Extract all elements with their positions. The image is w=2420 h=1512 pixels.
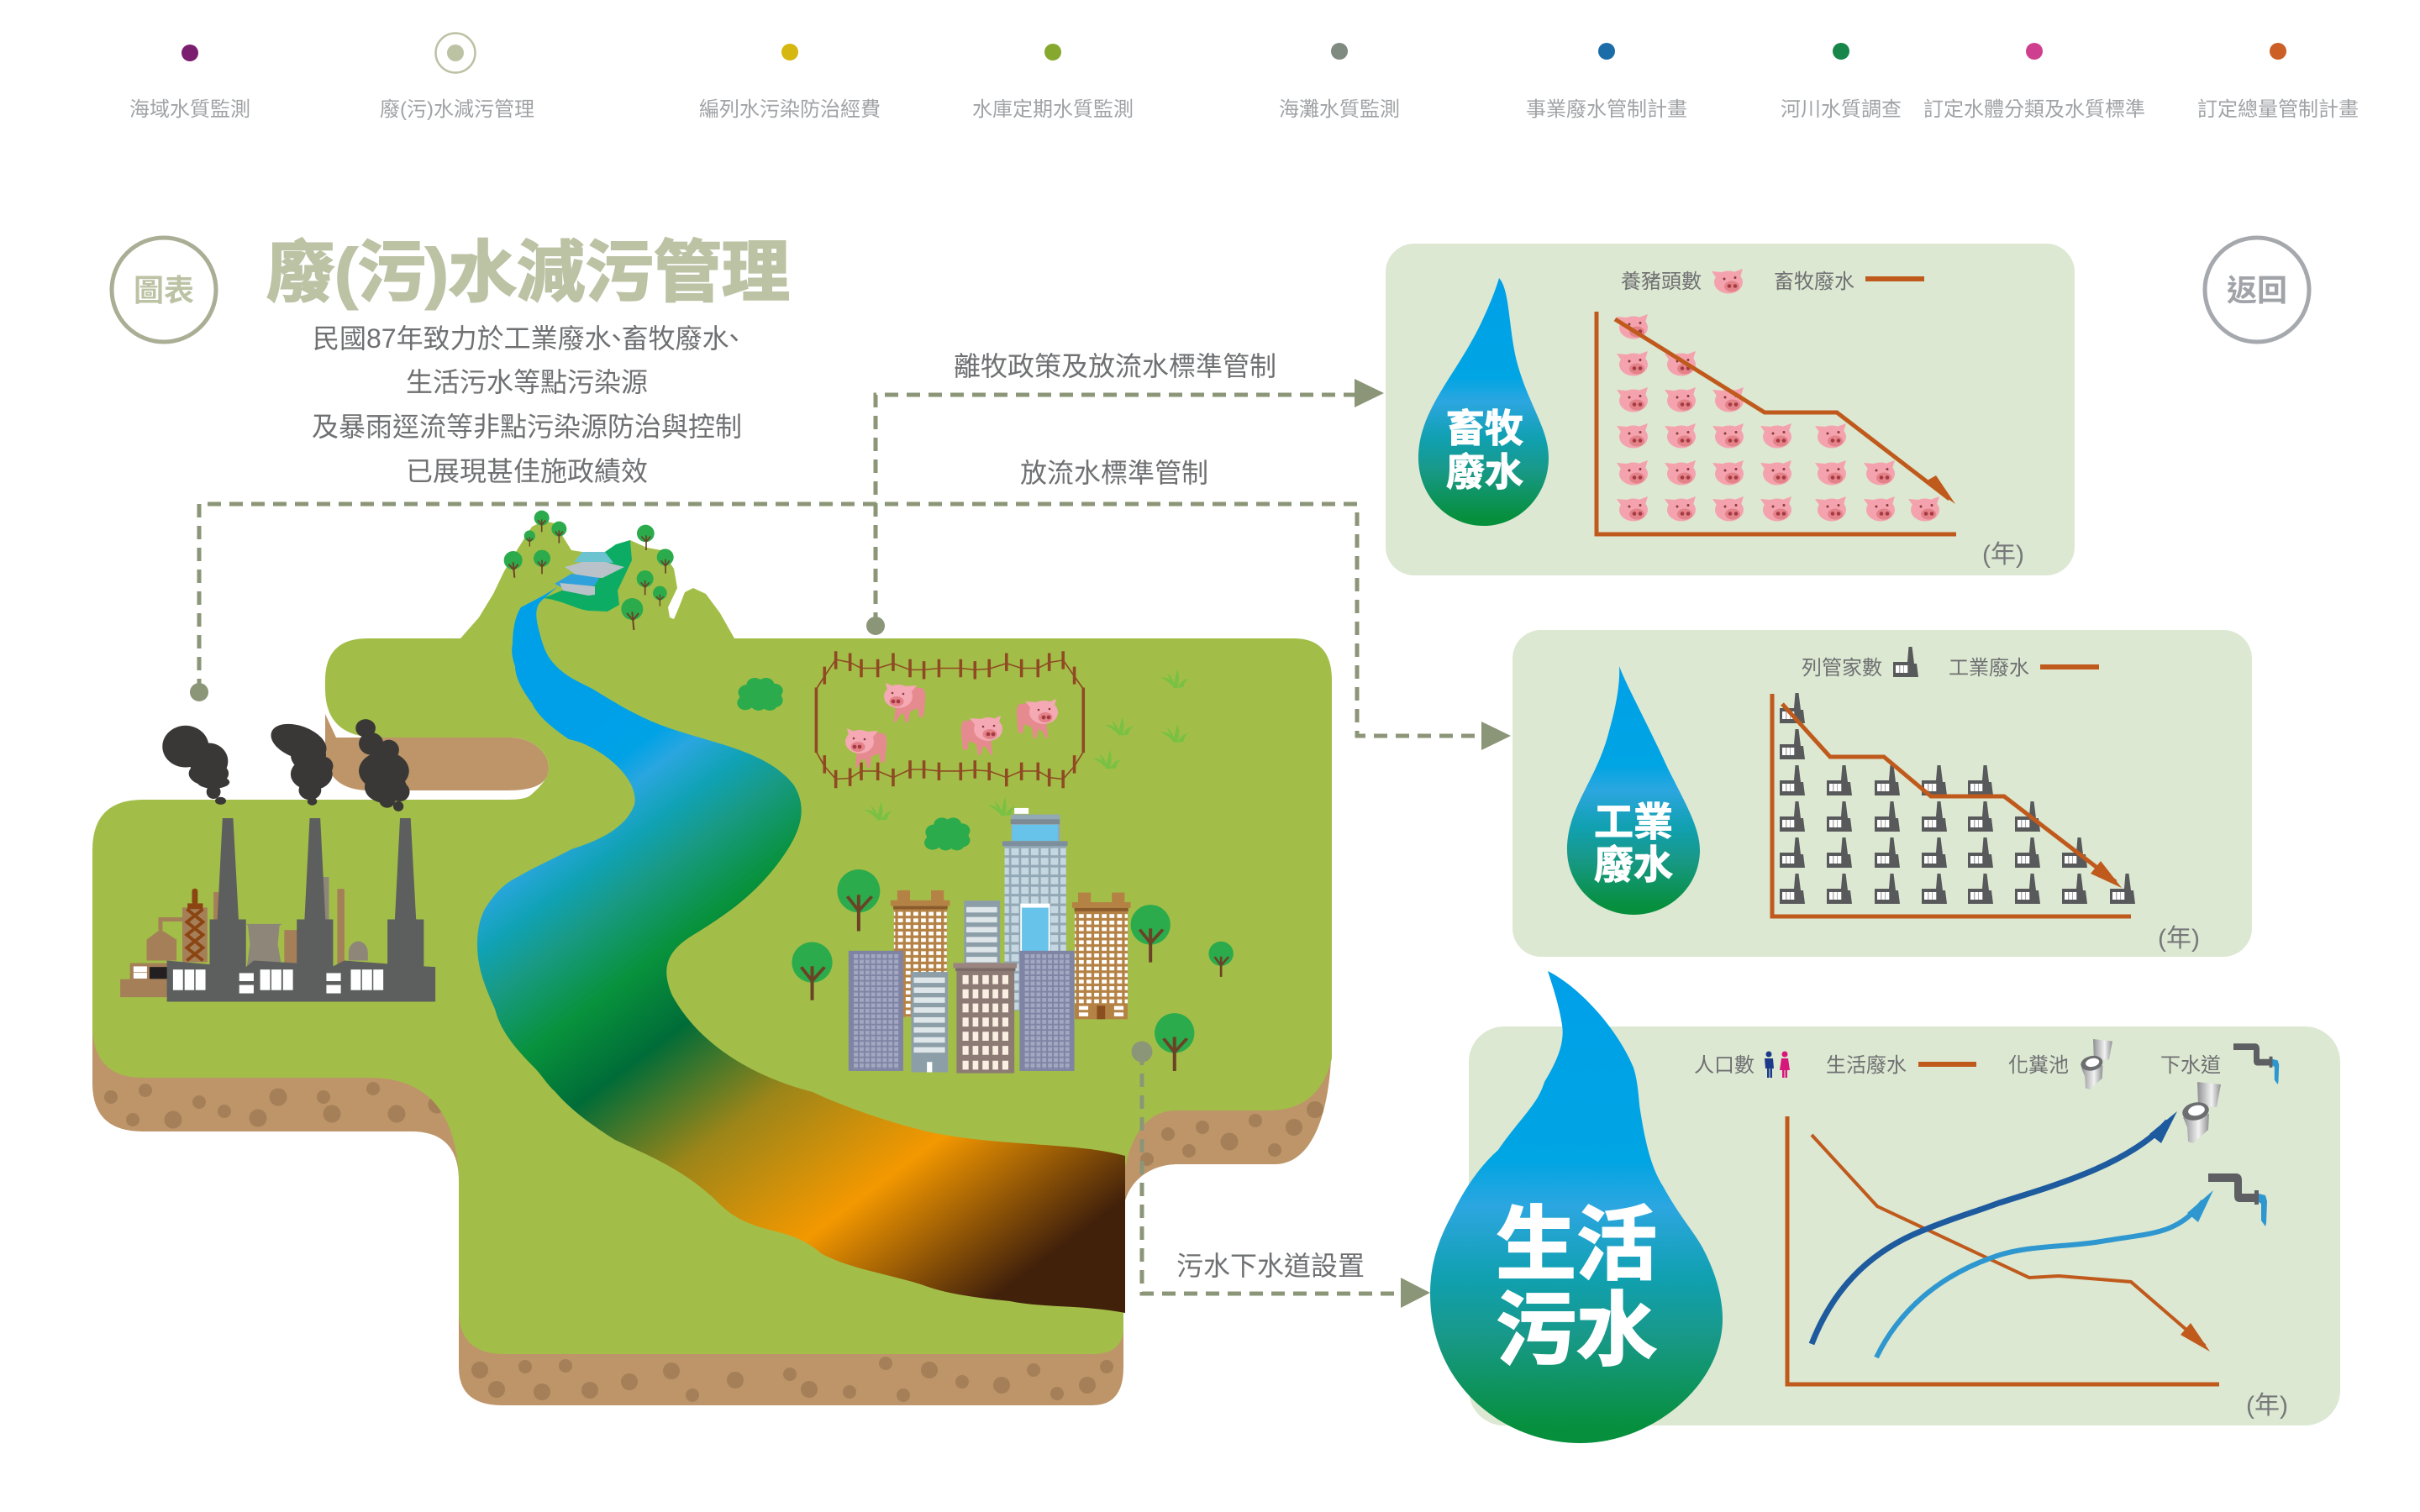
- drop: industrial: 工業: [1594, 800, 1673, 844]
- connector: sewer installation: [1131, 1042, 1430, 1308]
- drop: industrial: [1567, 666, 1700, 915]
- button: chart: [112, 238, 216, 342]
- drop: livestock: 畜牧: [1446, 407, 1523, 450]
- button: back: 返回: [2227, 273, 2287, 307]
- connector: livestock policy: [866, 379, 1384, 635]
- pig pictogram chart: [1597, 312, 1956, 534]
- pig pen, shrubs, grass and city: [737, 651, 1234, 1074]
- legend: 列管家數: [1802, 657, 1882, 680]
- top navigation timeline: 編列水污染防治經費: [699, 98, 881, 121]
- legend: 下水道: [2160, 1054, 2221, 1077]
- grass tufts: [864, 669, 1189, 820]
- grey slat buildings: [911, 900, 1000, 1072]
- landscape: [92, 511, 1332, 1405]
- top navigation timeline: 水庫定期水質監測: [972, 98, 1134, 121]
- title: 廢(污)水減污管理: [266, 235, 790, 310]
- hill trees: [504, 511, 674, 630]
- brown buildings: [891, 890, 1131, 1019]
- taupe building: [953, 963, 1017, 1074]
- icon: septic tank: [2181, 1082, 2221, 1143]
- soil layers: [92, 714, 1332, 1405]
- drop: domestic: 污水: [1496, 1286, 1657, 1376]
- year axis label: (年): [1982, 541, 2024, 569]
- drop: domestic: 生活: [1496, 1200, 1657, 1290]
- legend: [1802, 647, 2099, 680]
- river: [477, 586, 1125, 1313]
- grass ground: [92, 638, 1332, 1354]
- curve: sewer: [1876, 1190, 2213, 1357]
- top navigation timeline: 事業廢水管制計畫: [1526, 98, 1687, 121]
- label: effluent control: 放流水標準管制: [1020, 458, 1208, 488]
- legend: 養豬頭數: [1621, 270, 1702, 293]
- connector: effluent standard control: [190, 504, 1511, 750]
- button: back: [2205, 238, 2309, 342]
- top navigation timeline: 海域水質監測: [129, 98, 250, 121]
- legend: 人口數: [1694, 1054, 1754, 1077]
- panel: livestock wastewater: [1386, 244, 2075, 575]
- panel: domestic sewage: [1430, 971, 2340, 1443]
- tall tower: [1002, 808, 1068, 1011]
- chimneys and main building: [167, 818, 435, 1001]
- intro text: [312, 323, 748, 486]
- trend chart: [1787, 1082, 2267, 1384]
- top navigation timeline: 河川水質調查: [1781, 98, 1902, 121]
- label: sewer: 污水下水道設置: [1176, 1251, 1365, 1281]
- shrub west: [737, 678, 783, 711]
- top navigation timeline: 廢(污)水減污管理: [380, 98, 534, 121]
- top navigation timeline: 海灘水質監測: [1279, 98, 1400, 121]
- legend: 工業廢水: [1949, 657, 2029, 680]
- drop: livestock: [1418, 278, 1549, 526]
- factories: [120, 717, 435, 1001]
- icon: woman: [1780, 1052, 1790, 1078]
- legend: [1694, 1039, 2279, 1089]
- drop: domestic: [1430, 971, 1723, 1443]
- drop: industrial: 廢水: [1594, 843, 1673, 887]
- label: livestock policy: 離牧政策及放流水標準管制: [954, 351, 1276, 381]
- intro text: 及暴雨逕流等非點污染源防治與控制: [312, 412, 742, 442]
- fence: [816, 651, 1083, 788]
- legend: 化糞池: [2008, 1054, 2069, 1077]
- legend: 生活廢水: [1826, 1054, 1907, 1077]
- legend: [1621, 269, 1924, 294]
- intro text: 生活污水等點污染源: [406, 367, 648, 397]
- year axis label: (年): [2158, 925, 2200, 953]
- drop: livestock: 廢水: [1446, 450, 1523, 494]
- factory pictogram chart: [1772, 693, 2135, 916]
- icon: sewer pipe: [2208, 1173, 2267, 1226]
- curve: septic tank: [1812, 1111, 2177, 1344]
- smoke plumes: [162, 717, 410, 811]
- top navigation timeline: 訂定總量管制計畫: [2197, 98, 2359, 121]
- top navigation timeline: [129, 34, 2359, 121]
- intro text: 民國87年致力於工業廢水、畜牧廢水、: [313, 323, 748, 354]
- pigs in pen: [845, 683, 1058, 768]
- icon: man: [1765, 1052, 1774, 1078]
- mauve buildings: [849, 951, 1075, 1071]
- year axis label: (年): [2246, 1392, 2288, 1420]
- shrub: [924, 817, 970, 850]
- panel: industrial wastewater: [1512, 630, 2252, 957]
- city trees: [792, 869, 1234, 1071]
- legend: 畜牧廢水: [1774, 270, 1854, 293]
- button: chart: 圖表: [134, 273, 194, 307]
- top navigation timeline: 訂定水體分類及水質標準: [1923, 98, 2145, 121]
- intro text: 已展現甚佳施政績效: [406, 456, 648, 486]
- background plant: [120, 877, 368, 997]
- hill and reservoir: [460, 521, 734, 638]
